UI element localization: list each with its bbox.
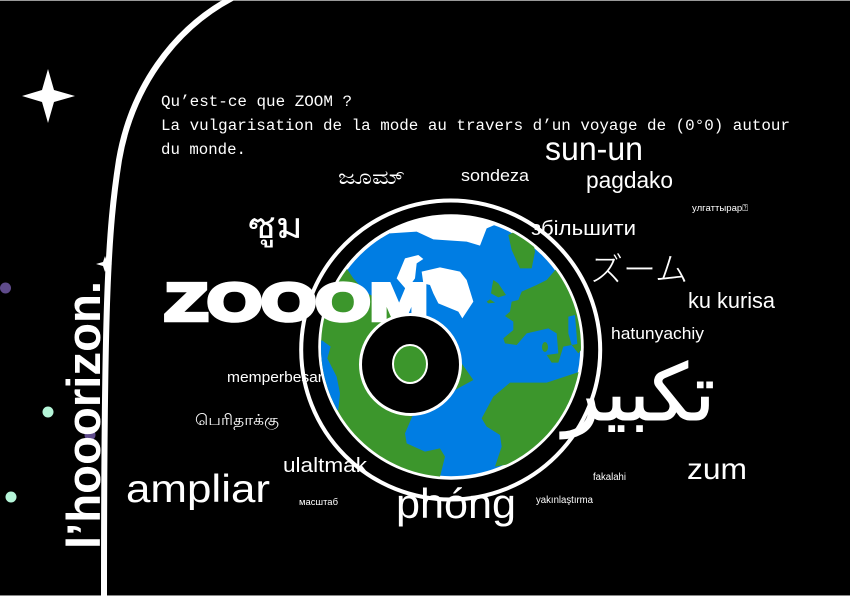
globe bbox=[310, 207, 590, 478]
islands: centre bbox=[487, 280, 506, 303]
big letter O bbox=[360, 314, 460, 414]
icon: large star bbox=[22, 69, 75, 123]
continent: top right bbox=[508, 232, 535, 268]
icon: small star on the arc bbox=[96, 256, 112, 272]
word: memperbesar: memperbesar bbox=[227, 369, 323, 386]
sea: left patch bbox=[321, 340, 340, 410]
vertical title: l’hooorizon. bbox=[57, 281, 110, 549]
word: ampliar: ampliar bbox=[126, 468, 270, 511]
word: ZOOOM: ZOOOM bbox=[165, 274, 428, 332]
continent: right bbox=[503, 270, 581, 363]
continent: bottom right bbox=[482, 372, 578, 467]
intro text: du monde. bbox=[161, 141, 246, 159]
word: Ukrainian: збільшити bbox=[531, 218, 636, 240]
word: yakinlastirma: yakınlaştırma bbox=[536, 495, 593, 506]
word: ulaltmak: ulaltmak bbox=[283, 455, 368, 477]
intro text bbox=[161, 93, 790, 159]
continent: left bbox=[310, 268, 473, 477]
word: Kyrgyz: улгаттырар⍰ bbox=[692, 203, 749, 213]
word: hatunyachiy: hatunyachiy bbox=[611, 324, 705, 343]
word: pagdako: pagdako bbox=[586, 167, 673, 193]
background dots bbox=[0, 282, 96, 502]
word: Arabic: تكبير bbox=[559, 349, 715, 440]
word: Japanese: ズーム bbox=[590, 243, 688, 291]
word: Kannada: ಜೂಮ್ bbox=[338, 167, 405, 189]
word: mashtab: масштаб bbox=[299, 497, 338, 507]
word: zum: zum bbox=[687, 453, 747, 486]
arc line bbox=[104, 0, 232, 596]
word: Tamil: பெரிதாக்கு bbox=[195, 412, 279, 430]
word: sondeza: sondeza bbox=[461, 166, 530, 185]
sea: right lake bbox=[568, 315, 577, 345]
word: sun-un: sun-un bbox=[545, 130, 643, 167]
ice cap bbox=[390, 218, 494, 246]
word: Thai: ซูม bbox=[248, 205, 303, 248]
island: right bbox=[542, 342, 548, 352]
ice islands bbox=[397, 255, 473, 318]
word: fakalahi: fakalahi bbox=[593, 472, 626, 483]
intro text: La vulgarisation de la mode au travers d’un voyage de (0°0) autour bbox=[161, 117, 790, 135]
word: ku kurisa: ku kurisa bbox=[688, 288, 776, 313]
intro text: Qu’est-ce que ZOOM ? bbox=[161, 93, 352, 111]
outer ring bbox=[301, 200, 600, 500]
word: phong: phóng bbox=[396, 480, 516, 527]
